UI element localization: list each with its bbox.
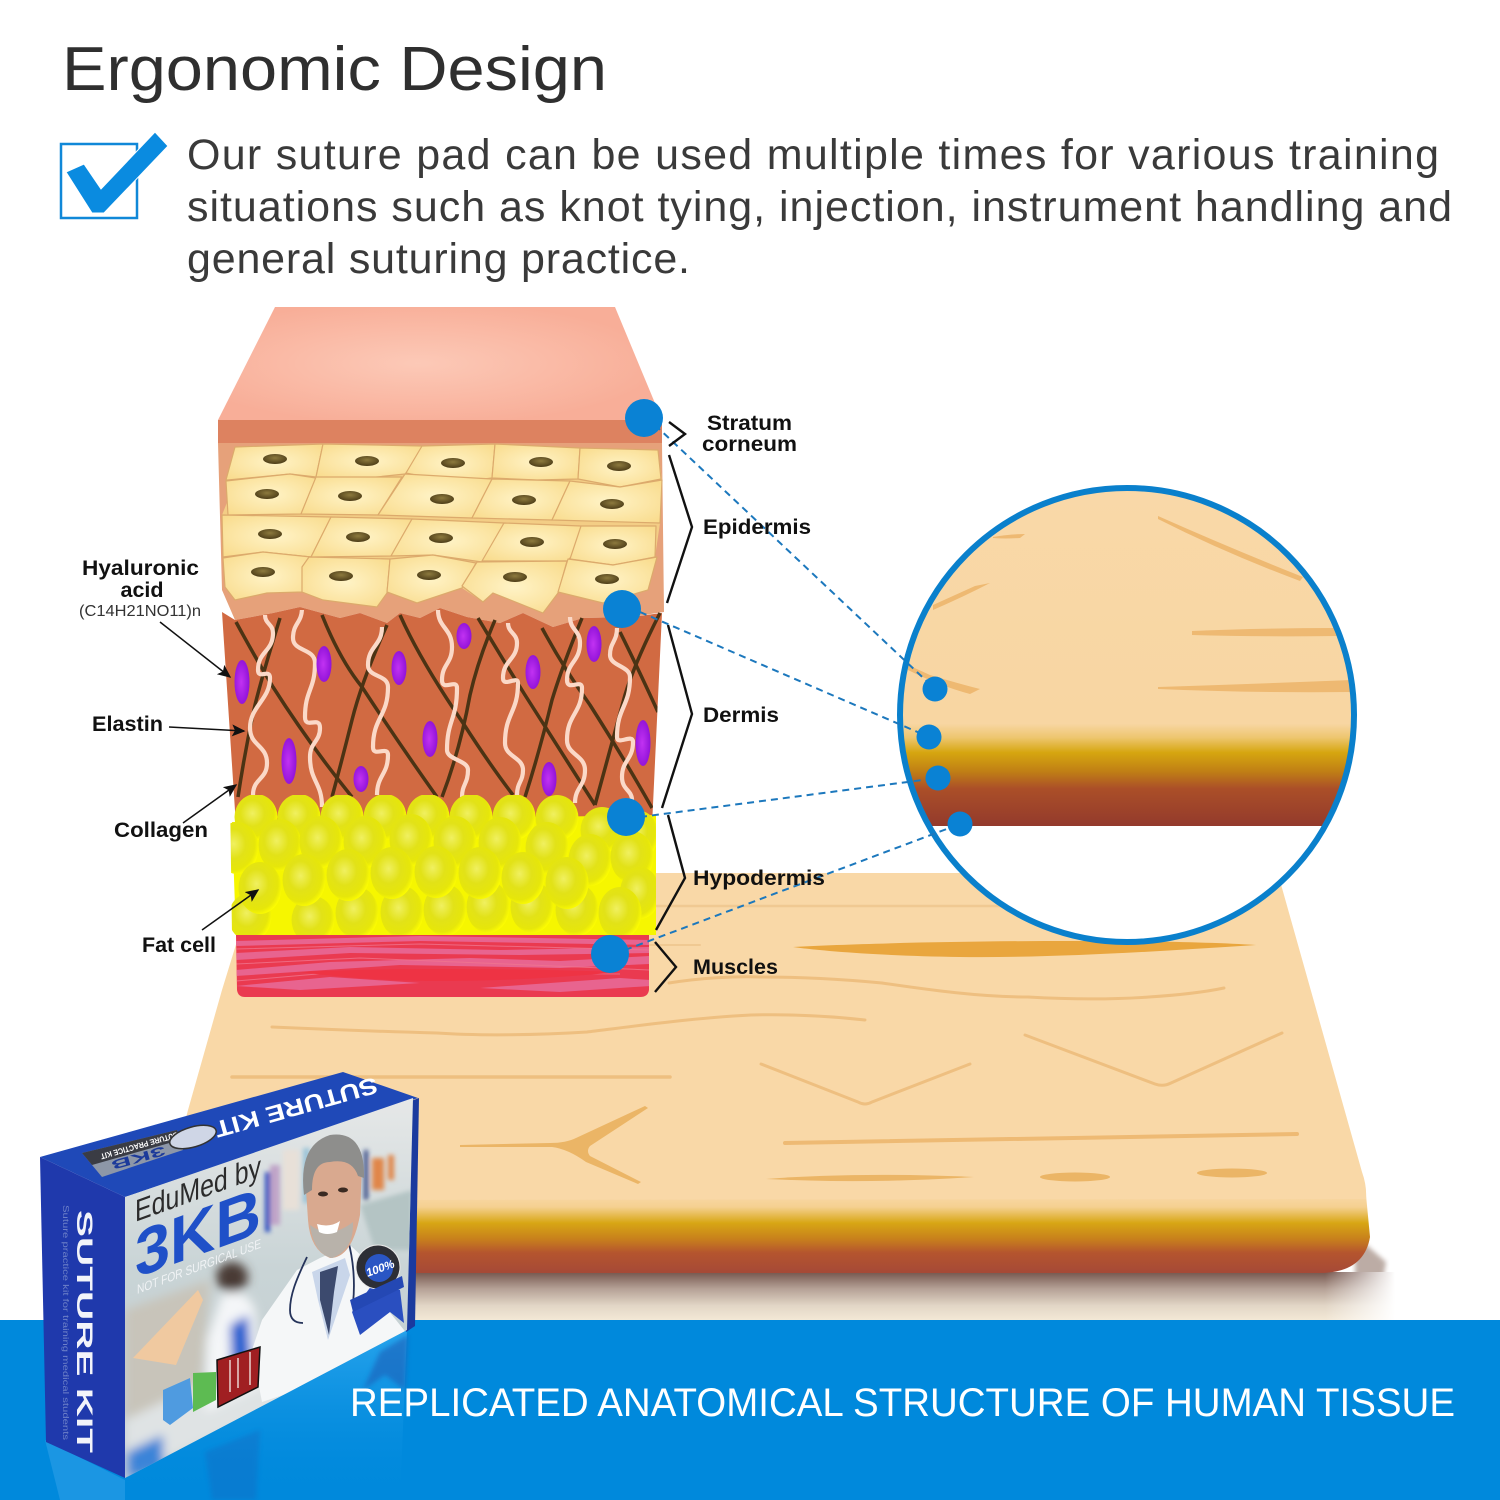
box top face: SUTURE KIT bbox=[212, 1072, 381, 1143]
component labels with arrows: Fat cell bbox=[142, 933, 216, 957]
box side face: SUTURE KIT bbox=[72, 1210, 97, 1454]
component labels with arrows bbox=[79, 556, 258, 957]
blurred lab background bbox=[265, 1148, 412, 1250]
satisfaction badge bbox=[350, 1245, 404, 1335]
mini suture pad bbox=[133, 1290, 203, 1365]
layer brackets bbox=[655, 422, 692, 992]
box right edge bbox=[406, 1098, 419, 1332]
title: Ergonomic Design bbox=[62, 35, 607, 104]
component labels with arrows: (C14H21NO11)n bbox=[79, 603, 201, 620]
box brand: EduMed by bbox=[135, 1149, 261, 1229]
small slits bbox=[766, 1168, 1267, 1182]
box reflection bbox=[45, 1330, 408, 1500]
small cards bbox=[163, 1378, 193, 1425]
epidermis underlay bbox=[218, 443, 664, 627]
satisfaction badge: 100% bbox=[365, 1258, 396, 1280]
dermis layer bbox=[222, 607, 662, 826]
pad incisions bbox=[232, 906, 1297, 1143]
box top face: SUTURE PRACTICE KIT bbox=[99, 1130, 179, 1161]
box top face: 3KB bbox=[109, 1143, 167, 1173]
dashed connector lines bbox=[625, 425, 960, 950]
body text bbox=[187, 131, 1452, 283]
component labels with arrows: Hyaluronic bbox=[82, 556, 199, 580]
box front face bbox=[125, 1098, 413, 1478]
magnifier circle bbox=[895, 485, 1365, 942]
product box bbox=[40, 1072, 419, 1478]
epidermis cells bbox=[222, 444, 662, 613]
skin cross-section diagram bbox=[216, 307, 664, 997]
stratum corneum layer bbox=[218, 420, 662, 443]
layer labels bbox=[693, 411, 825, 979]
component labels with arrows: Elastin bbox=[92, 712, 163, 736]
box brand: NOT FOR SURGICAL USE bbox=[137, 1236, 261, 1297]
pad top surface bbox=[165, 873, 1366, 1200]
blue marker dots bbox=[591, 399, 972, 973]
layer labels: corneum bbox=[702, 432, 797, 456]
box brand: 3KB bbox=[135, 1174, 261, 1293]
banner text: REPLICATED ANATOMICAL STRUCTURE OF HUMAN TISSUE bbox=[350, 1381, 1455, 1425]
pad deep slit bbox=[793, 941, 1256, 957]
skin top surface bbox=[218, 307, 662, 420]
hypodermis fat cells bbox=[230, 795, 656, 935]
suture pad bbox=[160, 873, 1395, 1320]
component labels with arrows: acid bbox=[120, 578, 164, 602]
layer labels: Epidermis bbox=[703, 515, 811, 539]
box side face bbox=[40, 1157, 125, 1478]
layer labels: Stratum bbox=[707, 411, 792, 435]
pad shadow bbox=[160, 1235, 1395, 1320]
box side face: Suture practice kit for training medical students bbox=[61, 1205, 71, 1440]
layer labels: Dermis bbox=[703, 703, 779, 727]
component labels with arrows: Collagen bbox=[114, 818, 208, 842]
body text: general suturing practice. bbox=[187, 235, 690, 283]
body text: Our suture pad can be used multiple times for various training bbox=[187, 131, 1439, 179]
icon: check mark in box bbox=[61, 132, 168, 218]
pad front edge layers bbox=[165, 1195, 1370, 1273]
muscle layer bbox=[236, 935, 650, 997]
layer labels: Hypodermis bbox=[693, 866, 825, 890]
instruments pouch bbox=[217, 1347, 260, 1407]
blue banner bbox=[0, 1320, 1500, 1500]
layer labels: Muscles bbox=[693, 955, 778, 979]
Y incision bbox=[460, 1106, 648, 1184]
doctor bbox=[252, 1135, 412, 1402]
body text: situations such as knot tying, injection, instrument handling and bbox=[187, 183, 1452, 231]
box top face bbox=[40, 1072, 418, 1197]
